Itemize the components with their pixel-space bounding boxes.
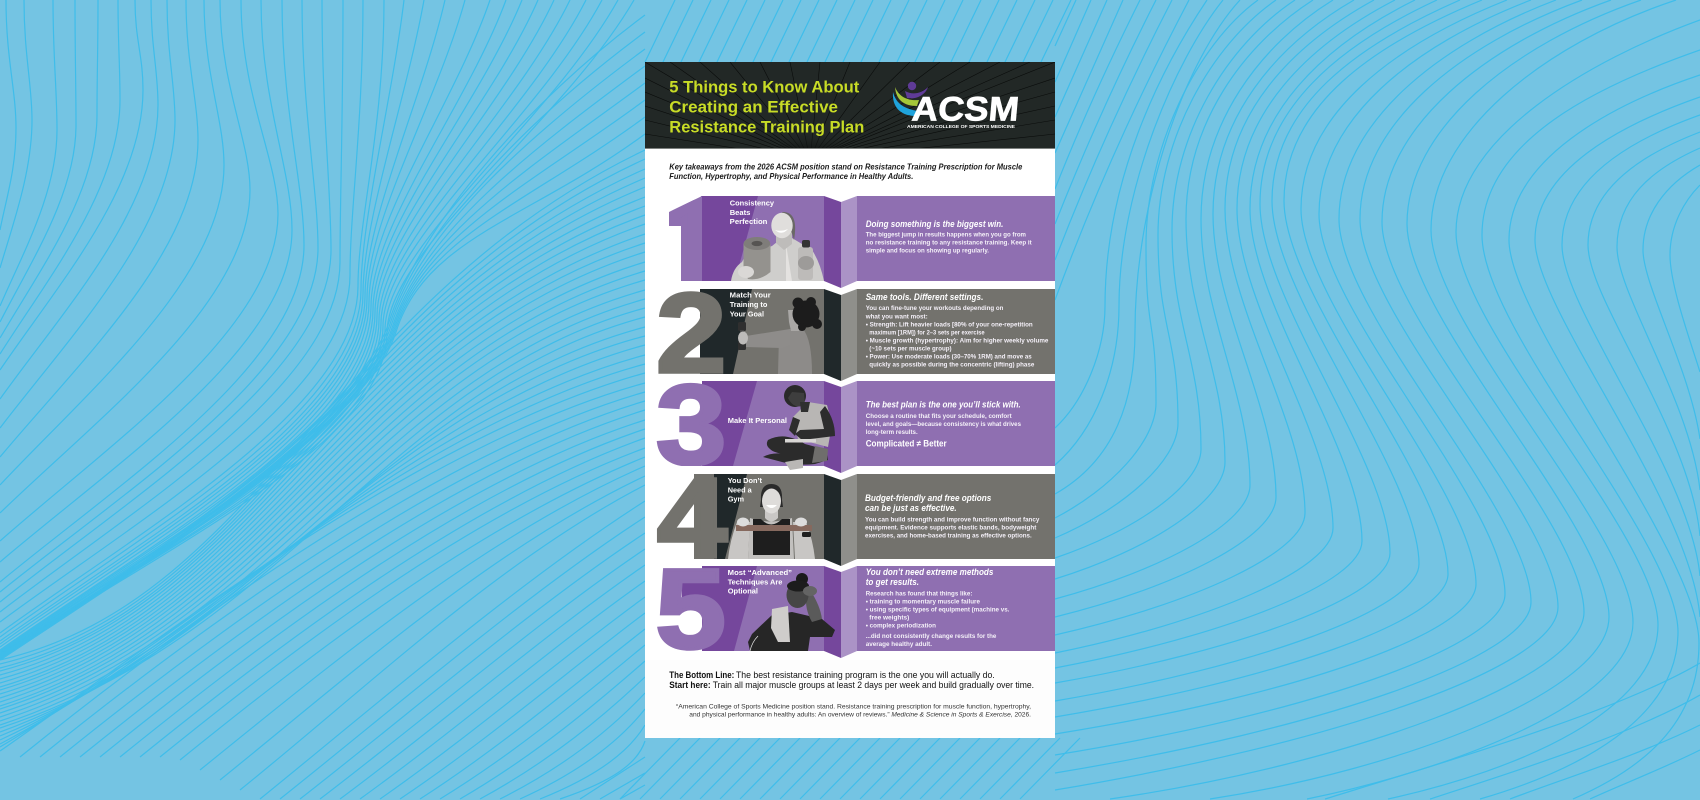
text: budget friendly: You can build strength and improve function without fancy [865,516,1040,523]
text: bottom line [669,669,1034,690]
text: best plan: The best plan is the one you’ll stick with. [866,400,1021,411]
text: doing something: The biggest jump in results happens when you go from [866,231,1026,238]
text: extreme methods: ...did not consistently change results for the [866,633,997,640]
text: budget friendly: can be just as effective. [865,503,957,514]
text: best plan [866,400,1021,449]
icon: ACSM figure swooshes [893,82,928,116]
panel: header banner [645,62,1055,149]
panel: item 3 Make It Personal [656,381,1055,473]
title: 5 Things to Know About [669,78,860,97]
text: same tools [865,292,1049,369]
label: Most Advanced Techniques Are Optional: Most “Advanced” [728,568,792,577]
label: Match Your Training to Your Goal [730,291,771,318]
numeral 3: 3 [656,362,726,488]
text: bottom line: Start here: [669,679,711,690]
text: same tools: (~10 sets per muscle group) [869,346,952,352]
photo: man seated writing [763,385,835,470]
text: doing something [866,219,1032,255]
text: budget friendly [865,493,1040,539]
label: Consistency Beats Perfection [730,198,775,226]
text: bottom line: The best resistance training program is the one you will actually do. [736,669,995,680]
text: bottom line: The Bottom Line: [669,669,734,680]
text: extreme methods: to get results. [866,577,919,588]
intro text: Function, Hypertrophy, and Physical Performance in Healthy Adults. [669,171,913,181]
text: same tools: what you want most: [865,313,928,320]
panel: infographic card [645,62,1055,738]
title: Resistance Training Plan [669,118,864,137]
text: extreme methods: average healthy adult. [866,641,932,648]
numeral 4: 4 [657,455,728,581]
logo: ACSM: AMERICAN COLLEGE OF SPORTS MEDICINE [907,124,1016,130]
label: Match Your Training to Your Goal: Match Your [730,291,771,300]
label: Make It Personal: Make It Personal [728,416,787,425]
text: bottom line: Train all major muscle groups at least 2 days per week and build gradually over time. [713,679,1034,690]
label: You Don't Need a Gym: Gym [728,495,744,504]
text: same tools: quickly as possible during the concentric (lifting) phase [869,362,1034,369]
label: Most Advanced Techniques Are Optional [728,568,792,596]
text: budget friendly: Budget-friendly and free options [865,493,991,504]
photo: woman with resistance band [728,484,815,559]
text: extreme methods: • complex periodization [866,622,936,629]
label: You Don't Need a Gym: Need a [728,485,752,494]
numeral 1: 1 [660,175,726,307]
panel: item 4 You Don't Need a Gym [656,474,1055,566]
text: budget friendly: exercises, and home-based training as effective options. [865,532,1032,539]
text: doing something: no resistance training to any resistance training. Keep it [866,240,1032,246]
panel: item 1 Consistency Beats Perfection [669,196,1055,288]
text: extreme methods: free weights) [869,614,909,621]
text: best plan: level, and goals—because consistency is what drives [866,421,1021,428]
text: extreme methods: • using specific types of equipment (machine vs. [866,606,1009,613]
label: Most Advanced Techniques Are Optional: Techniques Are [728,577,782,586]
text: same tools: maximum [1RM]) for 2–3 sets per exercise [869,329,985,336]
text: extreme methods: You don’t need extreme methods [866,567,993,578]
text: extreme methods: • training to momentary muscle failure [866,598,980,605]
numeral 5: 5 [656,546,726,672]
text: same tools: You can fine-tune your workouts depending on [866,305,1003,312]
citation [676,704,1031,719]
panel: item 2 Match Your Training to Your Goal [658,289,1055,381]
label: Consistency Beats Perfection: Consistency [730,198,775,208]
label: Match Your Training to Your Goal: Your Goal [730,309,764,318]
text: same tools: • Strength: Lift heavier loads [80% of your one-repetition [866,321,1033,328]
text: same tools: Same tools. Different settings. [866,292,983,303]
text: best plan: Choose a routine that fits your schedule, comfort [866,413,1012,420]
citation: “American College of Sports Medicine position stand. Resistance training prescription for muscle function, hypertrophy, [676,704,1031,711]
text: doing something: simple and focus on showing up regularly. [866,248,989,255]
label: You Don't Need a Gym: You Don’t [728,476,762,485]
label: Consistency Beats Perfection: Perfection [730,217,768,226]
numeral 2: 2 [656,270,726,396]
photo: woman with yoga mat and bottle [731,212,824,281]
intro text: Key takeaways from the 2026 ACSM position stand on Resistance Training Prescription for Muscle [669,161,1023,171]
logo: ACSM: ACSM [910,91,1021,128]
text: extreme methods: Research has found that things like: [866,590,972,597]
text: extreme methods [866,567,1009,648]
photo: woman holding dumbbell [738,297,822,374]
photo: woman with towel [748,573,835,651]
text: best plan: Complicated ≠ Better [866,439,947,449]
text: same tools: • Muscle growth (hypertrophy): Aim for higher weekly volume [866,337,1049,344]
title: Creating an Effective [669,98,838,117]
text: same tools: • Power: Use moderate loads (30–70% 1RM) and move as [866,354,1032,360]
panel: item 5 Most Advanced Techniques Are Optional [657,566,1055,658]
logo: ACSM [893,82,1021,130]
citation: and physical performance in healthy adults: An overview of reviews.” Medicine & Science in Sports & Exercise , 2026. [689,712,1031,719]
text: doing something: Doing something is the biggest win. [866,219,1003,230]
label: You Don't Need a Gym [728,476,762,504]
text: budget friendly: equipment. Evidence supports elastic bands, bodyweight [865,524,1037,531]
label: Match Your Training to Your Goal: Training to [730,300,768,309]
label: Most Advanced Techniques Are Optional: Optional [728,587,758,596]
label: Consistency Beats Perfection: Beats [730,208,750,217]
text: best plan: long-term results. [866,429,918,436]
intro text [669,161,1023,181]
title [669,78,864,137]
numeral 1 [669,196,702,281]
